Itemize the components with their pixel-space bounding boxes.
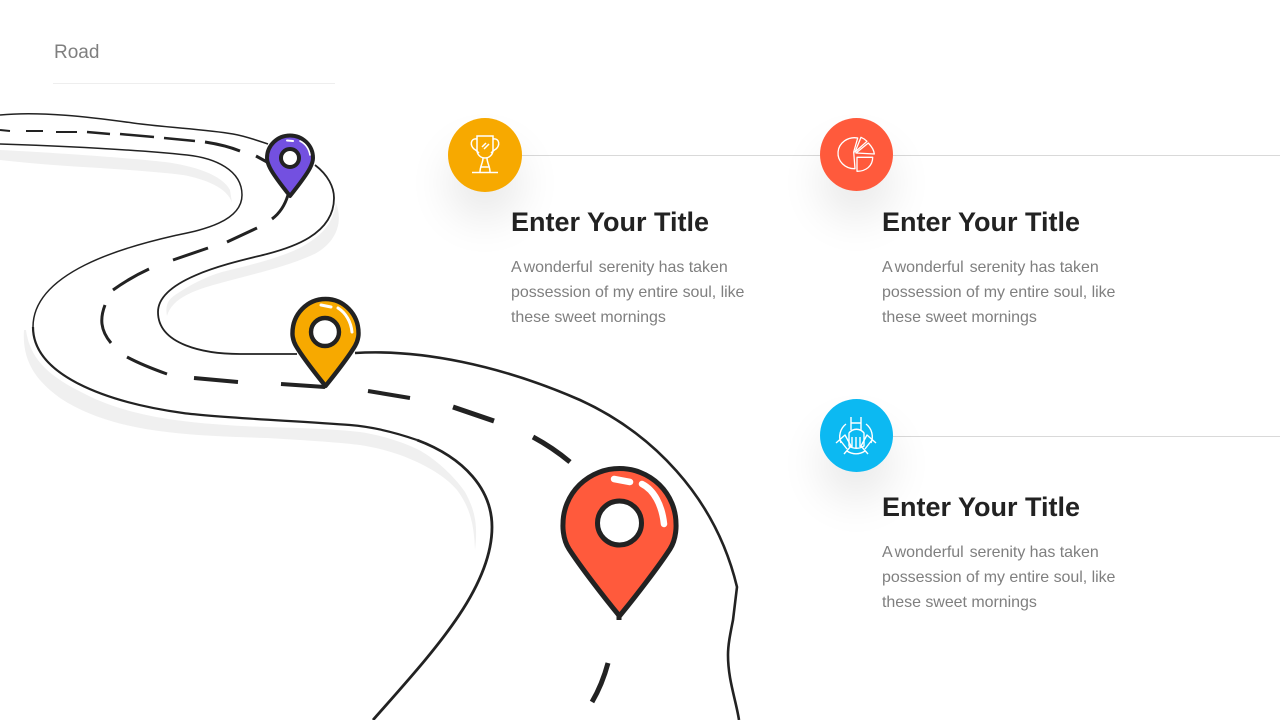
road shadows — [0, 150, 476, 550]
text block: first — [511, 207, 744, 326]
badge: trophy — [448, 118, 522, 192]
text block: second — [882, 207, 1115, 326]
text block: third: A wonderful serenity has taken — [882, 544, 1099, 560]
text block: third: possession of my entire soul, like — [882, 568, 1115, 586]
badge: hands — [820, 399, 893, 472]
text block: first: possession of my entire soul, like — [511, 284, 744, 300]
pin: purple — [267, 136, 313, 196]
header label: Road — [54, 42, 99, 63]
text block: third: Enter Your Title — [882, 492, 1080, 522]
pin: red — [563, 468, 676, 616]
road centre dashes — [0, 130, 619, 702]
text block: first: A wonderful serenity has taken — [511, 258, 728, 276]
road edges — [0, 114, 739, 720]
text block: second: these sweet mornings — [882, 308, 1037, 326]
badge: pie chart — [820, 118, 893, 191]
text block: third: these sweet mornings — [882, 594, 1037, 610]
text block: third — [882, 492, 1115, 610]
icon: joined hands — [836, 417, 876, 454]
text block: second: Enter Your Title — [882, 207, 1080, 237]
icon: trophy — [470, 135, 500, 174]
pin: orange — [292, 299, 359, 386]
text block: first: Enter Your Title — [511, 207, 709, 237]
icon: pie chart — [837, 136, 875, 172]
text block: second: A wonderful serenity has taken — [882, 258, 1099, 276]
text block: second: possession of my entire soul, like — [882, 284, 1115, 300]
text block: first: these sweet mornings — [511, 308, 666, 326]
